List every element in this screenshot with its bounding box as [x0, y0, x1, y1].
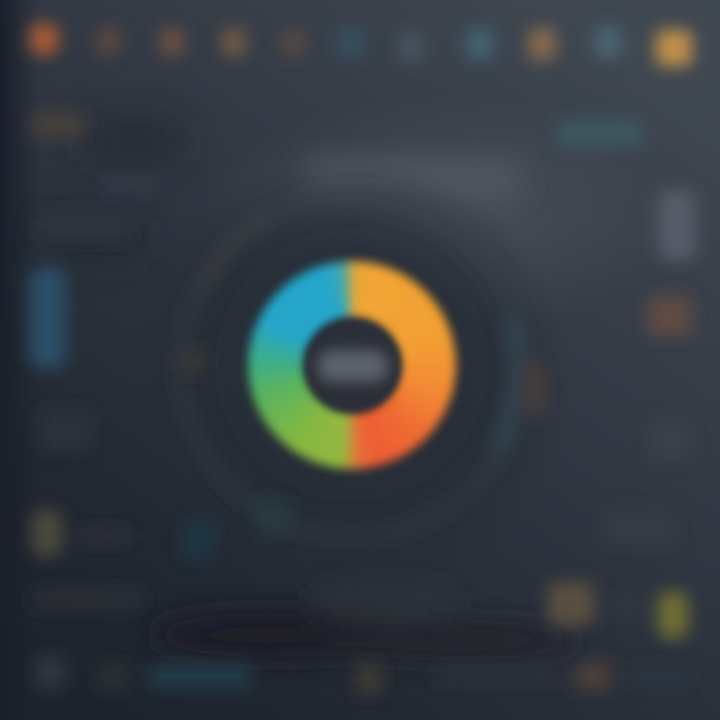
top heading over the rings — [305, 160, 520, 200]
donut dark surround — [234, 247, 470, 483]
dark patches upper left — [50, 120, 180, 260]
bottom band — [150, 590, 580, 657]
left side panels — [30, 212, 288, 608]
background highlight behind the rings — [200, 95, 680, 335]
left edge shading — [0, 0, 40, 720]
dark circular halo — [120, 155, 570, 605]
top icon row — [30, 24, 692, 66]
concentric rings — [180, 193, 524, 537]
upper left text block — [32, 112, 155, 192]
bottom right legend blocks — [548, 582, 688, 638]
upper right text block — [558, 120, 642, 146]
donut centre — [305, 320, 401, 412]
donut chart — [241, 254, 464, 476]
right side panels — [525, 190, 696, 544]
donut centre label pill — [318, 350, 388, 382]
bottom caption row — [36, 655, 688, 694]
